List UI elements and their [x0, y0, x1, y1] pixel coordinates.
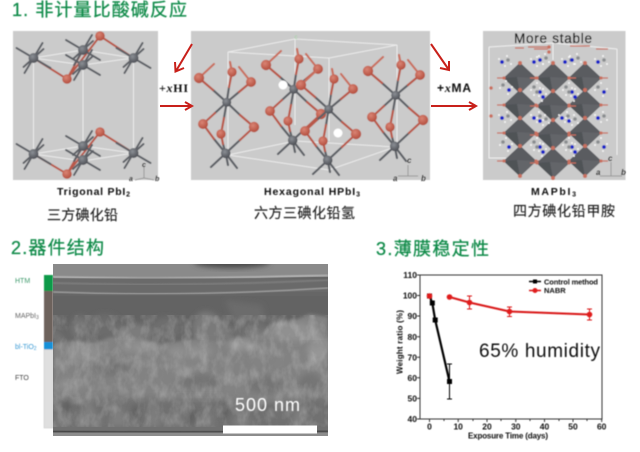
axis: b [155, 176, 160, 183]
upper perovskite grains [54, 306, 265, 342]
label: HTM: HTM [15, 278, 30, 285]
y tick labels: 60 [408, 373, 417, 383]
legend [529, 278, 598, 295]
layer: FTO [44, 350, 53, 428]
label: Trigonal PbI2: Trigonal PbI [57, 186, 125, 198]
panel: hexagonal HPbI3 crystal: c [294, 35, 298, 41]
y tick labels: 110 [403, 270, 417, 280]
x tick labels: 0 [427, 422, 432, 432]
layer: MAPbI3 [44, 291, 53, 342]
label: MAPbI3: MAPbI [531, 186, 570, 198]
title: section 1 heading: 1. 非计量比酸碱反应 [12, 0, 187, 20]
columnar bottom structures [71, 396, 326, 426]
y tick labels: 50 [408, 393, 417, 403]
axes frame [420, 275, 602, 419]
unit cell frame [489, 43, 617, 158]
series: control method [427, 294, 452, 399]
label: Trigonal PbI2: 2 [126, 192, 130, 198]
label: +xMA: +xMA [437, 81, 471, 95]
more stable label: More stable [514, 31, 592, 46]
iodine bonds [34, 36, 134, 174]
device layer stack [15, 275, 53, 428]
axis: a [596, 168, 601, 177]
x tick labels: 40 [540, 422, 549, 432]
axis [596, 154, 626, 177]
series: NABR [427, 293, 592, 320]
label: Hexagonal HPbI3: Hexagonal HPbI [264, 186, 355, 198]
label: MAPbI3: 3 [572, 192, 576, 198]
label: MAPbI3: 3 [36, 315, 39, 321]
panel: tetragonal MAPbI3 crystal [483, 31, 626, 180]
panel: trigonal PbI2 crystal [13, 31, 160, 183]
title: section 3 heading: 3.薄膜稳定性 [376, 239, 489, 259]
panel: hexagonal HPbI3 crystal [191, 31, 430, 183]
label: bl-TiO2: 2 [34, 346, 37, 352]
y tick labels: 100 [403, 290, 417, 300]
axis: c [407, 156, 412, 165]
legend: NABR [544, 286, 566, 295]
axis: c [608, 154, 613, 163]
arrow: to hexagonal [160, 102, 192, 110]
label: MAPbI3: MAPbI [15, 313, 36, 320]
y tick labels: 70 [408, 352, 417, 362]
legend: Control method [544, 278, 598, 286]
axis: b [621, 168, 626, 177]
main bright granular layer [53, 314, 328, 405]
caption: 四方碘化铅甲胺: 四方碘化铅甲胺 [513, 203, 615, 219]
x axis title: Exposure Time (days) [468, 432, 548, 440]
methylammonium molecules [498, 55, 512, 67]
octahedra [497, 61, 543, 95]
arrow: back to trigonal [175, 44, 192, 72]
y axis title: Weight ratio (%) [396, 310, 404, 374]
y tick labels [403, 270, 417, 424]
caption: 六方三碘化铅氢: 六方三碘化铅氢 [254, 205, 355, 221]
title: section 2 heading: 2.器件结构 [11, 238, 104, 258]
axis: b [421, 174, 426, 183]
arrow: to MAPbI3 [431, 102, 476, 110]
label: FTO: FTO [15, 375, 29, 382]
x tick labels [427, 422, 607, 432]
arrow: back to hexagonal [431, 44, 449, 70]
axis: a [393, 174, 398, 183]
line chart: weight ratio [396, 270, 607, 440]
darker gaps between grains [94, 360, 322, 397]
axis: c [142, 162, 146, 169]
axis [393, 156, 426, 183]
unit cell frame [34, 50, 134, 161]
scale bar [223, 426, 317, 434]
top iodine row [515, 46, 608, 49]
axis [129, 162, 160, 183]
caption: 三方碘化铅: 三方碘化铅 [47, 207, 118, 223]
y tick labels: 80 [408, 332, 417, 342]
label: Hexagonal HPbI3: 3 [356, 192, 360, 198]
label: +xHI: +xHI [159, 81, 188, 95]
annotation: 65% humidity: 65% humidity [479, 341, 600, 362]
y tick labels: 40 [408, 414, 417, 424]
layer: HTM [44, 275, 53, 291]
x tick labels: 10 [453, 422, 463, 432]
y tick labels: 90 [408, 311, 417, 321]
axis: a [129, 176, 133, 183]
SEM micrograph [53, 256, 328, 436]
scale label: 500 nm [235, 395, 300, 415]
x tick labels: 50 [568, 422, 578, 432]
x tick labels: 20 [482, 422, 492, 432]
label: bl-TiO2: bl-TiO [15, 344, 34, 351]
x tick labels: 60 [597, 422, 607, 432]
unit cell frame [228, 39, 397, 170]
x tick labels: 30 [511, 422, 521, 432]
layer: bl-TiO2 [44, 342, 53, 350]
